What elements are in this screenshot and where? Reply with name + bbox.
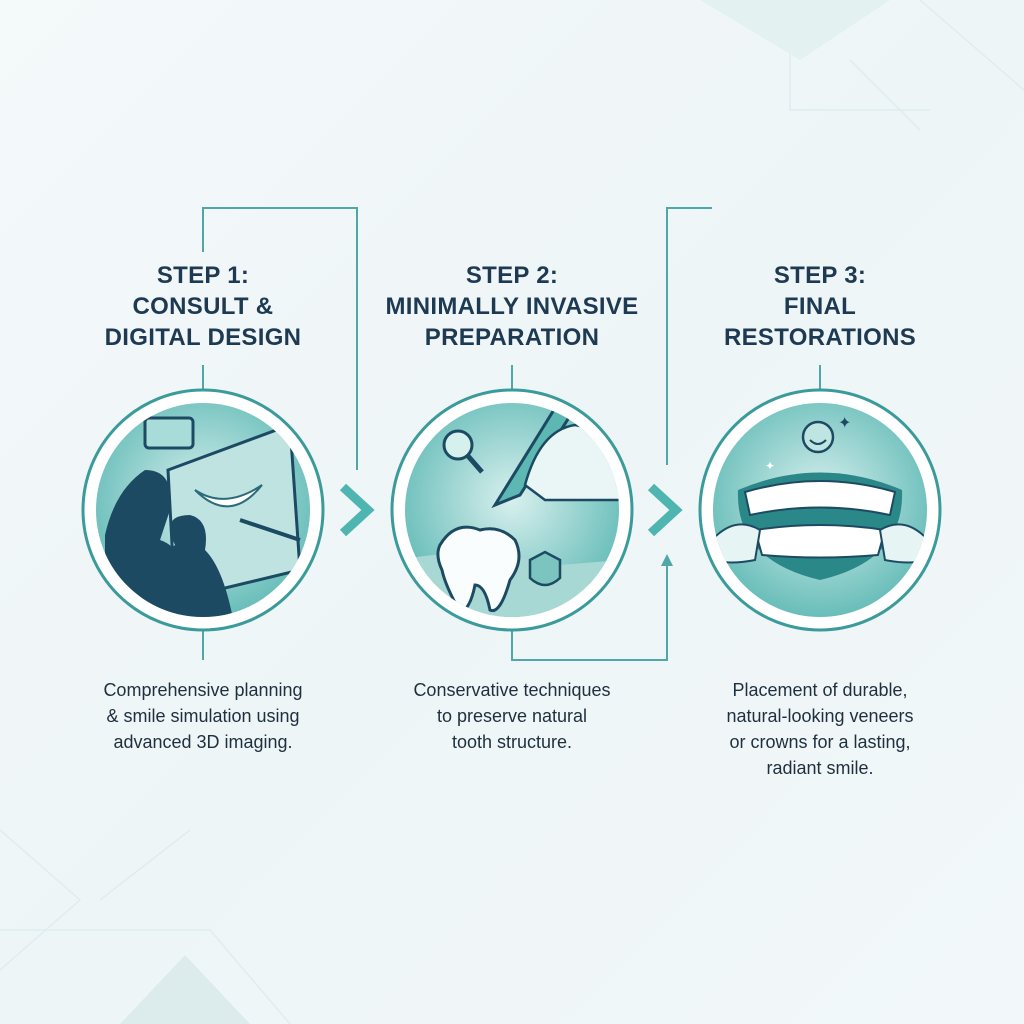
icon: circle 2 preparation <box>390 388 634 632</box>
heading step 2: STEP 2: <box>466 262 558 289</box>
text step 3 <box>726 680 914 778</box>
heading step 3: RESTORATIONS <box>724 324 916 351</box>
text step 2: to preserve natural <box>437 706 587 726</box>
icon: circle 1 consult <box>83 390 323 630</box>
heading step 3 <box>724 262 916 351</box>
text step 1: & smile simulation using <box>106 706 300 726</box>
heading step 3: FINAL <box>784 293 856 320</box>
text step 1: Comprehensive planning <box>103 680 303 700</box>
text step 3: radiant smile. <box>766 758 874 778</box>
text step 2: Conservative techniques <box>413 680 611 700</box>
heading step 1: DIGITAL DESIGN <box>105 324 301 351</box>
text step 2 <box>413 680 611 752</box>
icon: circle 3 restorations: ✦ <box>765 459 775 473</box>
text step 3: Placement of durable, <box>732 680 908 700</box>
heading step 2 <box>386 262 638 351</box>
icon: circle 3 restorations <box>700 390 940 630</box>
text step 1 <box>103 680 303 752</box>
connector lines <box>203 208 820 660</box>
icon: circle 3 restorations: ✦ <box>838 415 851 432</box>
heading step 1: CONSULT & <box>133 293 273 320</box>
chevron 1 <box>343 487 368 533</box>
text step 3: natural-looking veneers <box>726 706 914 726</box>
heading step 2: PREPARATION <box>425 324 599 351</box>
heading step 2: MINIMALLY INVASIVE <box>386 293 638 320</box>
heading step 1: STEP 1: <box>157 262 249 289</box>
heading step 1 <box>105 262 301 351</box>
text step 3: or crowns for a lasting, <box>729 732 911 752</box>
arrow up <box>661 554 673 566</box>
heading step 3: STEP 3: <box>774 262 866 289</box>
chevron 2 <box>651 487 676 533</box>
text step 1: advanced 3D imaging. <box>113 732 293 752</box>
text step 2: tooth structure. <box>452 732 572 752</box>
